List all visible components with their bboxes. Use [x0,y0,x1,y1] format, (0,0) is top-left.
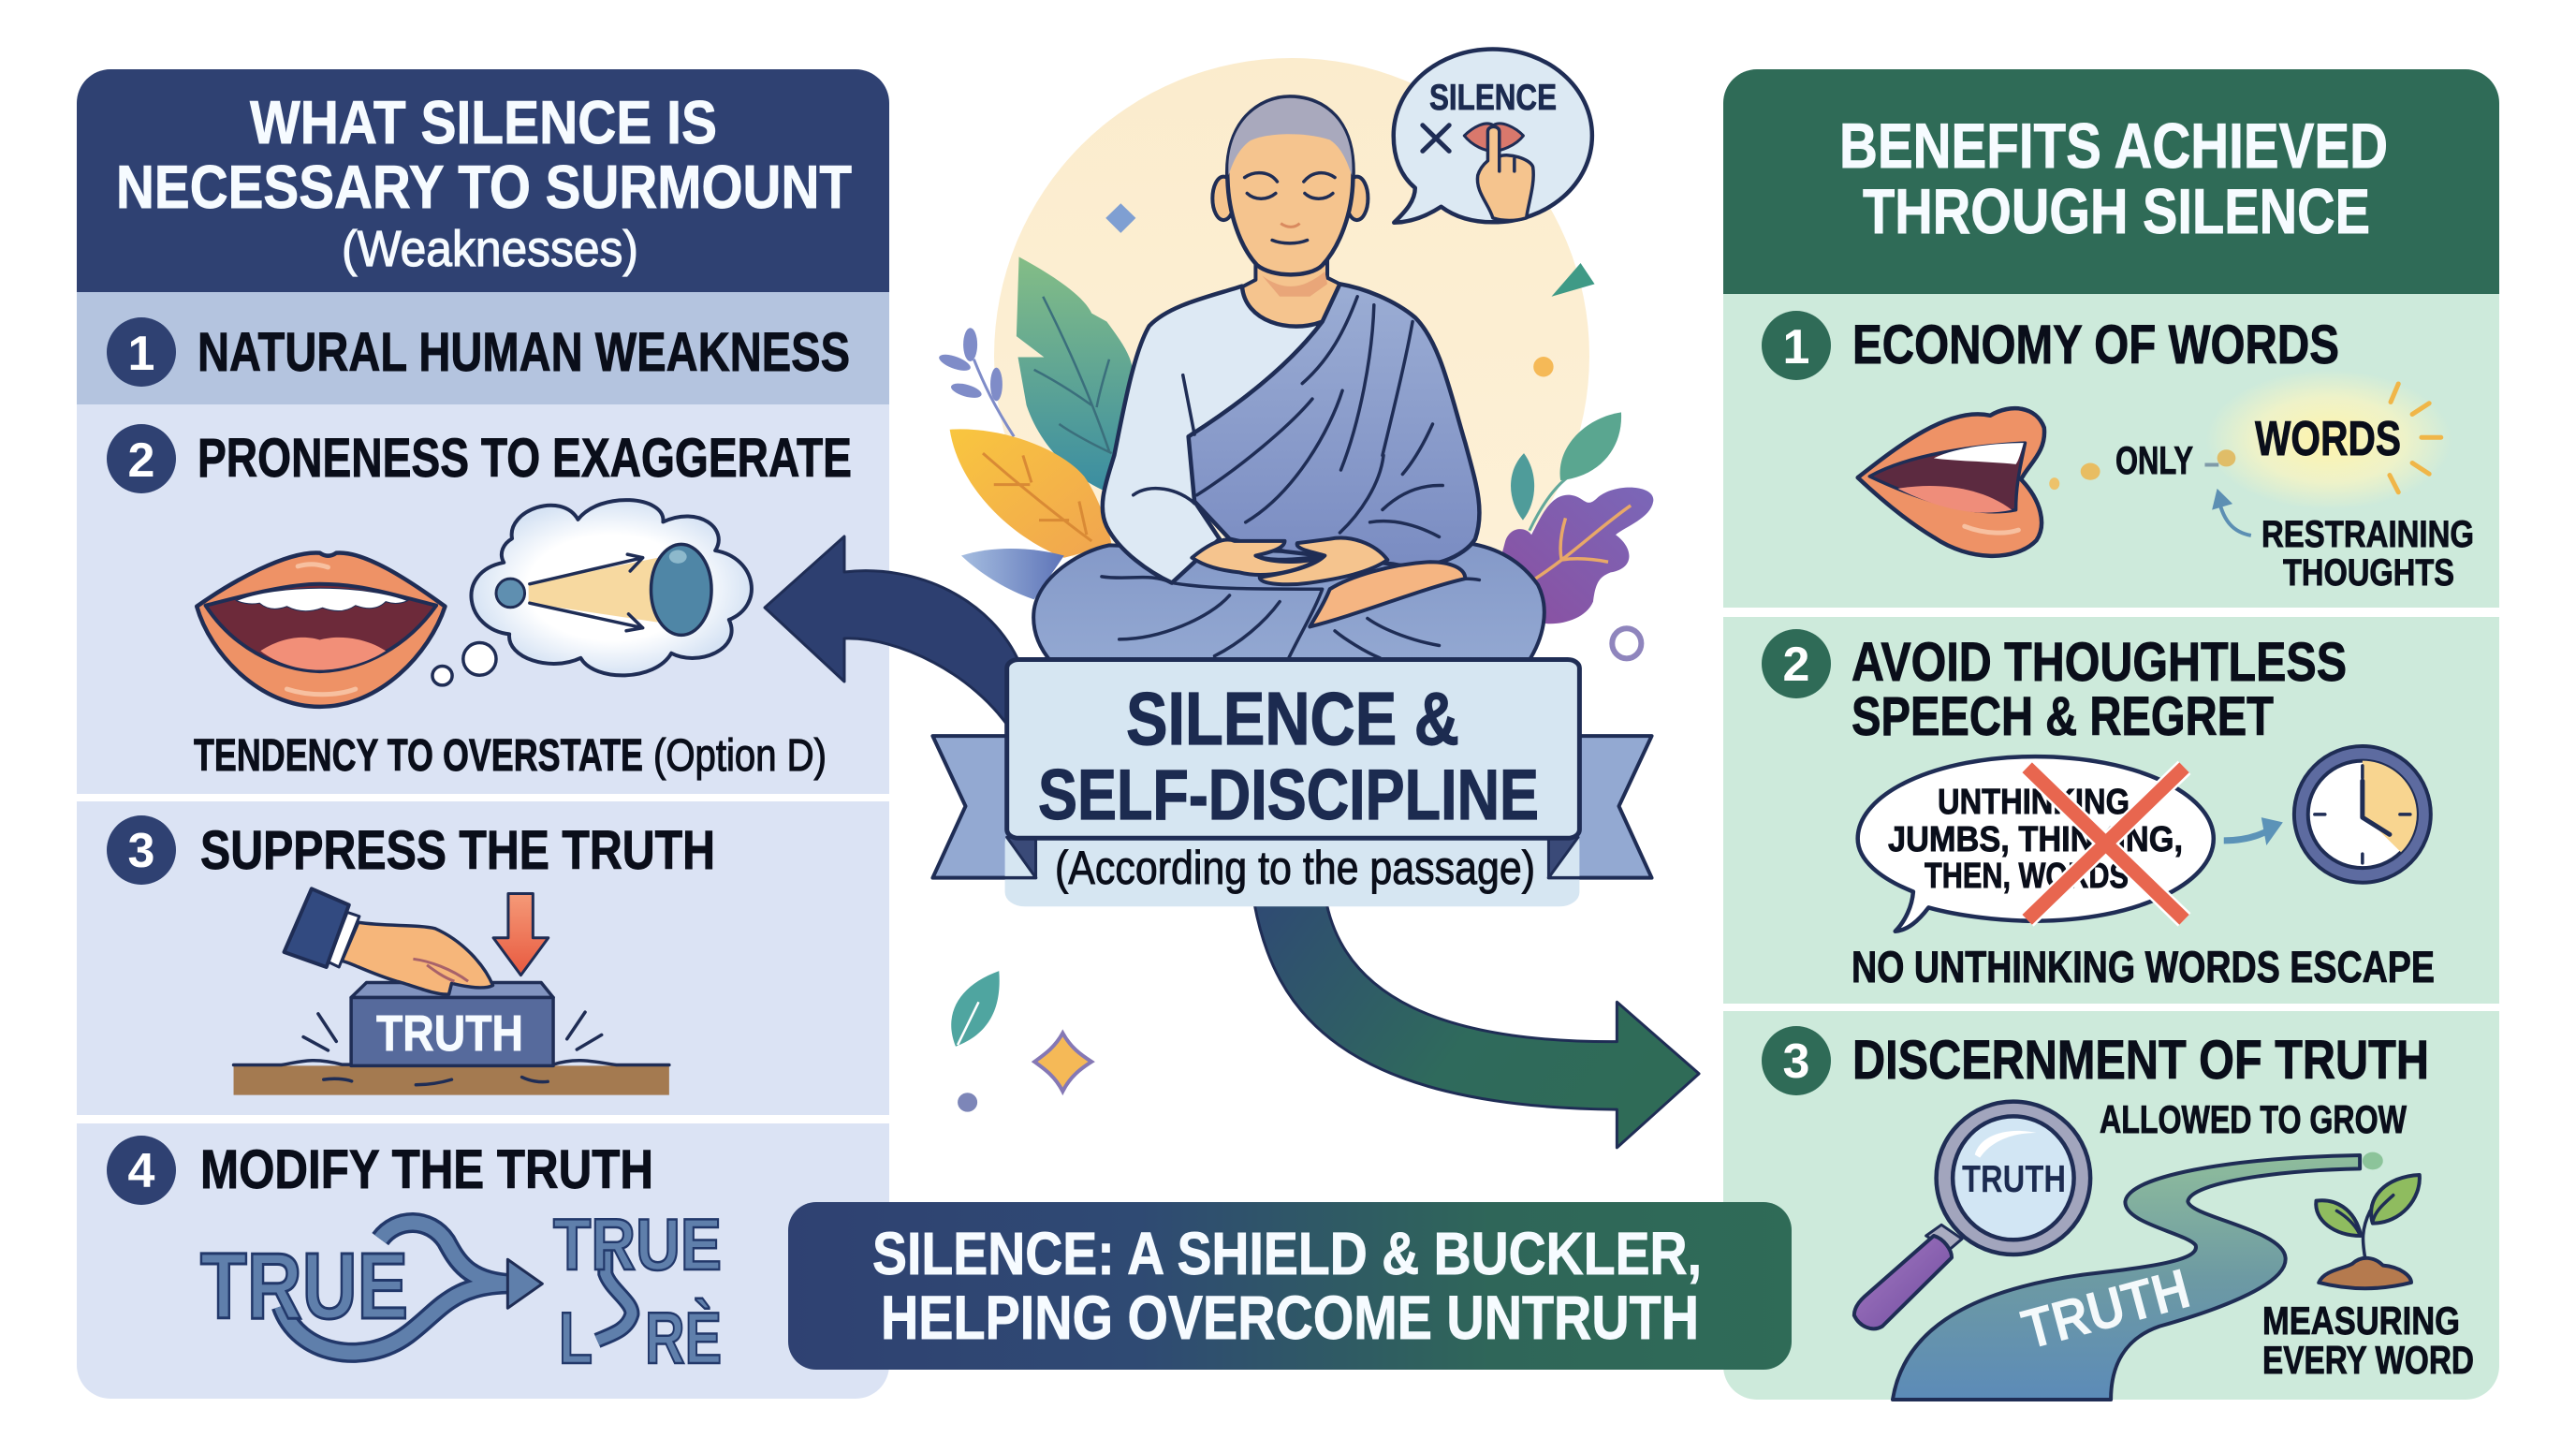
icon: hand pressing truth block into ground [234,888,669,1095]
icon: true being twisted: TRUE [553,1203,722,1285]
item 1: natural human weakness [107,317,850,387]
icon: thought cloud with exaggeration [432,500,752,685]
speech bubble: silence: SILENCE [1429,78,1557,118]
benefit 1: economy of words: THOUGHTS [2283,552,2454,594]
speech bubble: silence [1394,49,1592,223]
item 4: modify the truth: 4 [128,1144,155,1198]
item 2: proneness to exaggerate: PRONENESS TO EXAGGERATE [198,428,852,489]
title banner: (According to the passage) [1055,842,1535,894]
item 3: suppress the truth: 3 [128,824,154,878]
benefit 2: avoid thoughtless speech: AVOID THOUGHTLESS [1852,632,2347,693]
decorative leaf and star [951,971,1091,1112]
item 4: modify the truth [107,1136,722,1379]
benefit 1: economy of words: WORDS [2255,412,2401,466]
arrow: centre to benefits [1254,904,1699,1148]
speech bubble crossed out: UNTHINKING [1938,783,2130,822]
left panel heading: (Weaknesses) [342,221,638,277]
benefit 3: discernment of truth: 3 [1783,1034,1809,1089]
icon: magnifying glass over truth [1854,1102,2090,1328]
title banner [932,659,1652,906]
bottom callout: shield and buckler: SILENCE: A SHIELD & BUCKLER, [872,1220,1702,1287]
bottom callout: shield and buckler [788,1202,1792,1370]
icon: side mouth [1858,408,2044,556]
panel: benefits [1723,69,2499,1400]
panel: weaknesses [77,69,889,1400]
item 2: proneness to exaggerate: 2 [128,433,154,488]
figure: meditating monk [1033,96,1544,662]
item 3: suppress the truth: TRUTH [376,1005,523,1062]
right panel heading: THROUGH SILENCE [1863,176,2370,247]
arrow: centre to weaknesses [765,536,1020,730]
item 4: modify the truth: MODIFY THE TRUTH [200,1139,653,1200]
benefit 1: economy of words: 1 [1783,320,1809,374]
caption: tendency to overstate: (Option D) [653,731,827,781]
icon: winding road of truth: TRUTH [2015,1256,2196,1361]
icon: sprout [2316,1175,2420,1288]
benefit 3: discernment of truth: EVERY WORD [2262,1338,2474,1382]
item 3: suppress the truth [107,815,715,1095]
icon: true being twisted: TRUE [200,1234,408,1339]
arrow and clock [2224,746,2431,883]
benefit 1: economy of words [1762,311,2474,594]
icon: open mouth [197,552,445,707]
right panel heading [1839,110,2388,247]
left panel heading: NECESSARY TO SURMOUNT [116,153,852,221]
item 3: suppress the truth: SUPPRESS THE TRUTH [200,820,715,881]
speech bubble crossed out: JUMBS, THINKING, [1888,820,2183,859]
icon: true being twisted: RÈ [645,1297,722,1379]
benefit 1: economy of words: ONLY [2115,438,2193,482]
icon: true being twisted: L [559,1297,593,1379]
speech bubble crossed out [1858,756,2214,932]
left panel heading [116,88,852,277]
caption: tendency to overstate: TENDENCY TO OVERSTATE [194,731,643,781]
benefit 1: economy of words: ECONOMY OF WORDS [1852,315,2339,375]
title banner: SILENCE & [1126,677,1459,760]
benefit 3: discernment of truth: ALLOWED TO GROW [2100,1097,2407,1141]
title banner: SELF-DISCIPLINE [1038,756,1539,835]
icon: winding road of truth [1893,1152,2383,1400]
benefit 3: discernment of truth: MEASURING [2262,1299,2460,1343]
background sun circle [994,58,1589,653]
icon: sparkling words trail [2049,370,2452,536]
benefit 3: discernment of truth: DISCERNMENT OF TRUTH [1852,1030,2429,1091]
item 1: natural human weakness: 1 [128,327,154,381]
benefit 3: discernment of truth [1762,1026,2474,1400]
benefit 2: avoid thoughtless speech: SPEECH & REGRET [1852,686,2274,747]
item 1: natural human weakness: NATURAL HUMAN WEAKNESS [198,322,850,383]
benefit 2: avoid thoughtless speech [1762,629,2435,991]
bottom callout: shield and buckler: HELPING OVERCOME UNTRUTH [881,1283,1699,1352]
left panel heading: WHAT SILENCE IS [250,88,717,156]
right panel heading: BENEFITS ACHIEVED [1839,110,2388,182]
speech bubble crossed out: THEN, WORDS [1925,857,2129,896]
item 2: proneness to exaggerate [107,424,852,781]
icon: magnifying glass over truth: TRUTH [1962,1157,2066,1200]
plants and accent shapes [936,203,1653,658]
benefit 2: avoid thoughtless speech: 2 [1783,638,1809,692]
benefit 1: economy of words: RESTRAINING [2261,514,2474,555]
icon: true being twisted [200,1203,722,1379]
benefit 2: avoid thoughtless speech: NO UNTHINKING WORDS ESCAPE [1852,942,2435,991]
ribbon ends [932,659,1652,906]
